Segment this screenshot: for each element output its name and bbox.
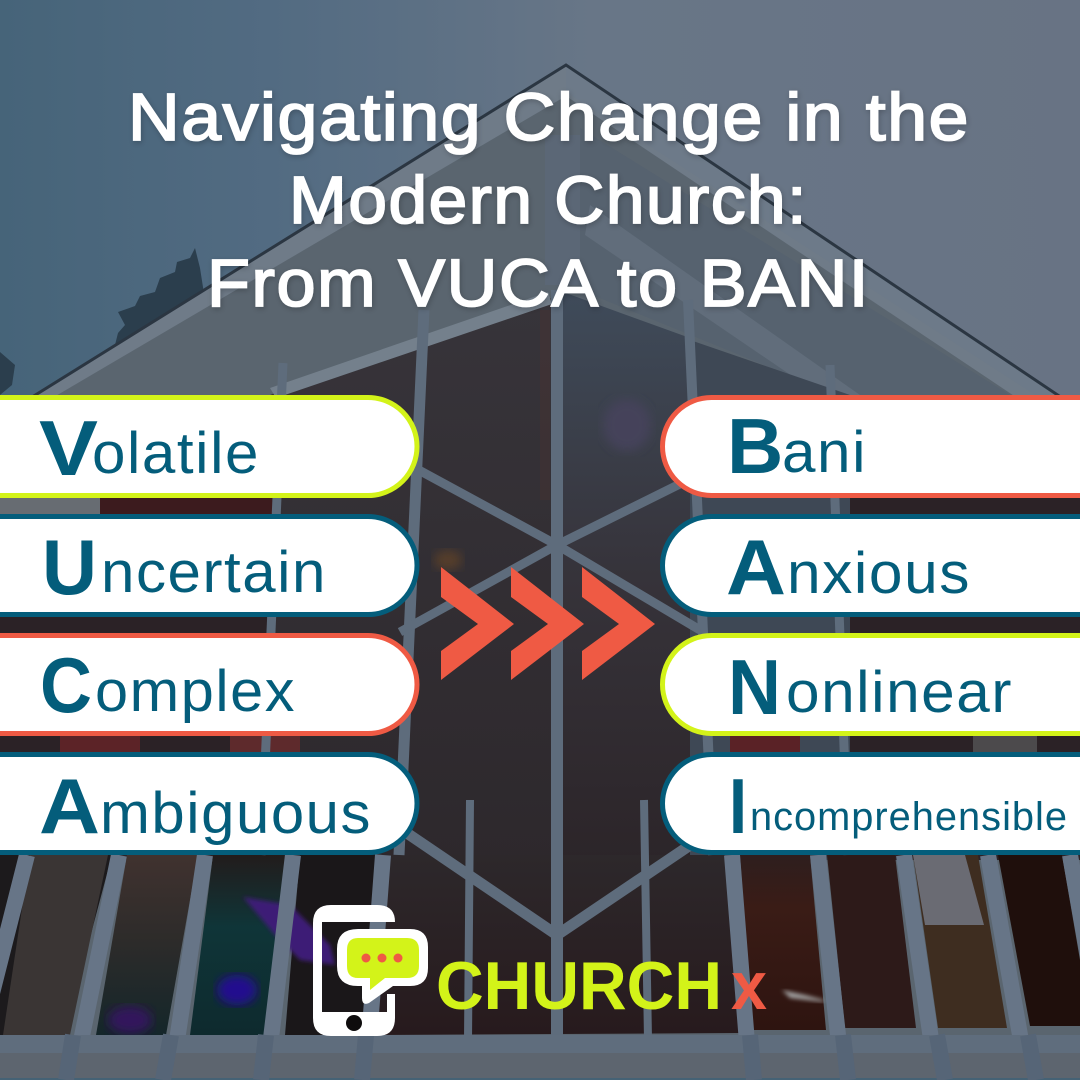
upper-left frame strip — [270, 292, 552, 398]
pill: Complex: C — [40, 641, 92, 729]
logo: CHURCHx — [313, 905, 767, 1036]
pill: Bani — [662, 398, 1080, 496]
lens flares — [243, 897, 335, 965]
pill: Complex: omplex — [95, 659, 296, 724]
title: Navigating Change in the — [128, 80, 970, 155]
pill: Bani: B — [727, 402, 783, 490]
pill: Nonlinear — [662, 636, 1080, 734]
lower panes — [0, 855, 112, 1035]
title: From VUCA to BANI — [207, 246, 870, 321]
title — [128, 80, 970, 321]
reddish glass hints — [100, 498, 280, 514]
pill: Uncertain: ncertain — [101, 540, 327, 605]
pill: Anxious — [662, 516, 1080, 614]
pill: Ambiguous: mbiguous — [100, 781, 372, 846]
pill: Ambiguous: A — [39, 762, 100, 850]
pill: Volatile: V — [39, 404, 98, 492]
pill: Nonlinear: N — [728, 643, 781, 731]
pill: Ambiguous — [0, 754, 417, 852]
fascia — [0, 65, 1080, 440]
pill: Incomprehensible: ncomprehensible — [750, 795, 1068, 839]
wordmark: CHURCH — [436, 948, 722, 1024]
pill: Bani: ani — [782, 420, 867, 485]
logo: CHURCHx: x — [731, 948, 767, 1024]
pill: Nonlinear: onlinear — [786, 660, 1013, 725]
glass block — [270, 298, 552, 870]
pill: Anxious: A — [726, 523, 786, 611]
pill: Uncertain — [0, 516, 417, 614]
icon: phone with chat bubble — [313, 905, 428, 1036]
arrows: three chevrons — [441, 567, 655, 680]
pill: Complex — [0, 636, 417, 734]
mullions — [0, 290, 1080, 1080]
panel: VUCA list — [0, 398, 417, 852]
base panels — [0, 1035, 1080, 1053]
pill: Incomprehensible: I — [729, 762, 747, 850]
gable post — [545, 135, 580, 285]
soffit right — [580, 128, 1010, 400]
pill: Uncertain: U — [42, 523, 97, 611]
pill: Anxious: nxious — [787, 541, 971, 606]
title: Modern Church: — [289, 163, 808, 238]
pill: Incomprehensible — [662, 754, 1080, 852]
pill: Volatile: olatile — [92, 421, 260, 486]
pill: Volatile — [0, 398, 417, 496]
panel: BANI list — [662, 398, 1080, 852]
tree behind roof — [115, 248, 205, 345]
